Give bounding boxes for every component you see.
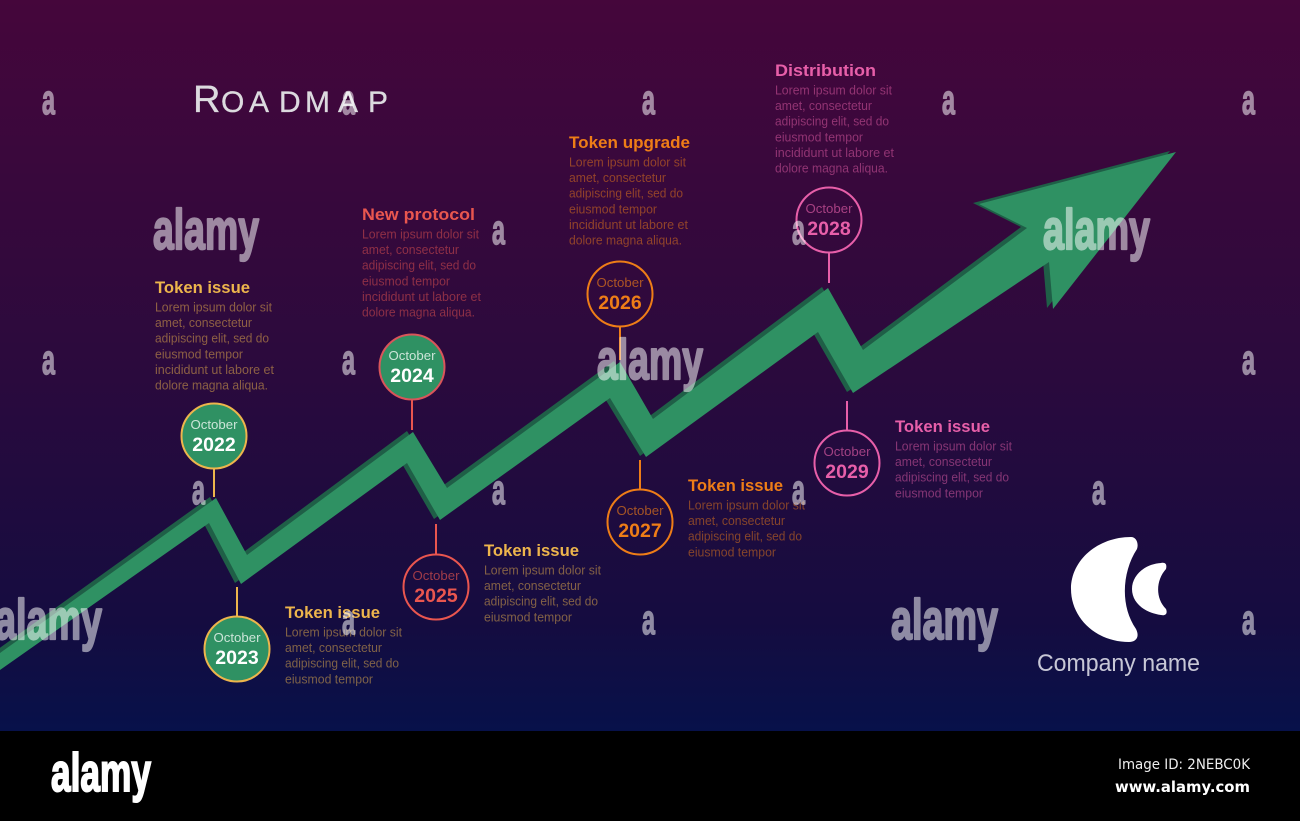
date 2029: October xyxy=(824,444,871,459)
milestone 2029 xyxy=(814,401,1013,500)
description 2029: amet, consectetur xyxy=(895,455,992,469)
description 2028: incididunt ut labore et xyxy=(775,146,895,160)
watermark overlay: a xyxy=(642,596,655,643)
description 2027: Lorem ipsum dolor sit xyxy=(688,498,806,512)
watermark overlay: a xyxy=(342,336,355,383)
year 2029: 2029 xyxy=(825,461,869,483)
description 2027: eiusmod tempor xyxy=(688,545,776,559)
year 2022: 2022 xyxy=(192,434,236,456)
badge 2029 xyxy=(814,430,880,496)
footer logo: alamy xyxy=(51,743,151,803)
logo large crescent xyxy=(1071,537,1138,642)
watermark overlay: a xyxy=(342,76,355,123)
heading 2027: Token issue xyxy=(688,476,783,495)
date 2022: October xyxy=(190,417,238,432)
description 2022: adipiscing elit, sed do xyxy=(155,332,269,346)
footer bar xyxy=(0,731,1300,821)
description 2024: amet, consectetur xyxy=(362,243,459,257)
connector 2026 xyxy=(619,327,621,360)
heading 2025: Token issue xyxy=(484,541,579,560)
footer url: www.alamy.com xyxy=(1115,778,1250,796)
heading 2024: New protocol xyxy=(362,205,475,224)
connector 2022 xyxy=(213,469,215,497)
description 2025: eiusmod tempor xyxy=(484,610,572,624)
description 2024: Lorem ipsum dolor sit xyxy=(362,228,480,242)
watermark overlay: a xyxy=(42,336,55,383)
description 2025: amet, consectetur xyxy=(484,579,581,593)
badge 2024 xyxy=(380,334,444,400)
heading 2028: Distribution xyxy=(775,61,876,80)
rising zigzag arrow xyxy=(0,151,1176,670)
description 2025: adipiscing elit, sed do xyxy=(484,595,598,609)
milestone 2025 xyxy=(404,524,602,624)
description 2024 xyxy=(362,228,482,320)
connector 2029 xyxy=(846,401,848,430)
description 2027 xyxy=(688,498,806,559)
connector 2023 xyxy=(236,587,238,616)
heading 2023: Token issue xyxy=(285,603,380,622)
description 2029: Lorem ipsum dolor sit xyxy=(895,440,1013,454)
description 2023: adipiscing elit, sed do xyxy=(285,657,399,671)
badge 2022 xyxy=(182,404,246,468)
title: OADMAP xyxy=(221,86,388,119)
description 2024: dolore magna aliqua. xyxy=(362,306,475,320)
milestone 2028 xyxy=(775,61,895,283)
arrow body xyxy=(0,152,1176,670)
connector 2028 xyxy=(828,253,830,283)
milestone 2023 xyxy=(204,587,403,686)
heading 2029: Token issue xyxy=(895,417,990,436)
description 2022: eiusmod tempor xyxy=(155,347,243,361)
badge 2025 xyxy=(404,554,468,620)
description 2028: adipiscing elit, sed do xyxy=(775,115,889,129)
watermark overlay: a xyxy=(492,206,505,253)
badge 2027 xyxy=(608,490,672,554)
watermark overlay: a xyxy=(1242,336,1255,383)
image id: Image ID: 2NEBC0K xyxy=(1118,757,1250,773)
description 2024: incididunt ut labore et xyxy=(362,290,482,304)
description 2026: amet, consectetur xyxy=(569,171,666,185)
description 2026: dolore magna aliqua. xyxy=(569,234,682,248)
description 2023: Lorem ipsum dolor sit xyxy=(285,626,403,640)
watermark overlay: a xyxy=(792,206,805,253)
description 2029: adipiscing elit, sed do xyxy=(895,471,1009,485)
description 2027: amet, consectetur xyxy=(688,514,785,528)
logo small crescent xyxy=(1132,563,1167,615)
title: R xyxy=(193,79,220,121)
description 2022: amet, consectetur xyxy=(155,316,252,330)
watermark overlay: alamy xyxy=(891,588,998,652)
connector 2027 xyxy=(639,460,641,489)
description 2024: eiusmod tempor xyxy=(362,274,450,288)
badge 2028 xyxy=(796,188,862,252)
year 2027: 2027 xyxy=(618,520,662,542)
badge 2023 xyxy=(204,616,270,682)
description 2026: eiusmod tempor xyxy=(569,202,657,216)
description 2026 xyxy=(569,156,689,248)
badge 2026 xyxy=(588,262,652,326)
year 2028: 2028 xyxy=(807,218,851,240)
description 2025: Lorem ipsum dolor sit xyxy=(484,564,602,578)
description 2025 xyxy=(484,564,602,624)
watermark overlay: alamy xyxy=(153,198,259,262)
watermark overlay: a xyxy=(492,466,505,513)
milestone 2022 xyxy=(155,278,275,497)
description 2026: Lorem ipsum dolor sit xyxy=(569,156,687,170)
description 2023 xyxy=(285,626,403,686)
watermark overlay: a xyxy=(42,76,55,123)
watermark overlay: a xyxy=(192,466,205,513)
company name: Company name xyxy=(1037,650,1200,677)
connector 2024 xyxy=(411,400,413,430)
description 2022: incididunt ut labore et xyxy=(155,363,275,377)
watermark overlay: a xyxy=(1092,466,1105,513)
date 2026: October xyxy=(596,275,644,290)
connector 2025 xyxy=(435,524,437,554)
description 2026: adipiscing elit, sed do xyxy=(569,187,683,201)
date 2027: October xyxy=(616,503,664,518)
description 2028: Lorem ipsum dolor sit xyxy=(775,84,893,98)
description 2028: amet, consectetur xyxy=(775,99,872,113)
description 2026: incididunt ut labore et xyxy=(569,218,689,232)
watermark overlay: a xyxy=(792,466,805,513)
arrow shadow xyxy=(0,151,1170,669)
description 2028: dolore magna aliqua. xyxy=(775,162,888,176)
year 2026: 2026 xyxy=(598,292,642,314)
description 2023: amet, consectetur xyxy=(285,641,382,655)
year 2023: 2023 xyxy=(215,647,259,669)
watermark overlay: a xyxy=(342,596,355,643)
milestone 2024 xyxy=(362,205,482,430)
description 2024: adipiscing elit, sed do xyxy=(362,259,476,273)
watermark overlay xyxy=(0,76,1255,652)
milestone 2027 xyxy=(608,460,806,559)
watermark overlay: alamy xyxy=(1043,198,1150,262)
description 2023: eiusmod tempor xyxy=(285,672,373,686)
description 2028: eiusmod tempor xyxy=(775,130,863,144)
milestone 2026 xyxy=(569,133,690,360)
date 2024: October xyxy=(388,348,436,363)
description 2022: Lorem ipsum dolor sit xyxy=(155,300,273,314)
heading 2022: Token issue xyxy=(155,278,250,297)
description 2027: adipiscing elit, sed do xyxy=(688,530,802,544)
description 2029: eiusmod tempor xyxy=(895,486,983,500)
description 2022 xyxy=(155,300,275,392)
watermark overlay: a xyxy=(1242,596,1255,643)
year 2025: 2025 xyxy=(414,585,458,607)
watermark overlay: a xyxy=(642,76,655,123)
description 2028 xyxy=(775,84,895,176)
date 2025: October xyxy=(412,568,460,583)
description 2022: dolore magna aliqua. xyxy=(155,378,268,392)
watermark overlay: alamy xyxy=(597,328,703,392)
description 2029 xyxy=(895,440,1013,500)
date 2028: October xyxy=(806,201,853,216)
company logo xyxy=(1071,537,1167,642)
watermark overlay: a xyxy=(942,76,955,123)
date 2023: October xyxy=(214,630,261,645)
heading 2026: Token upgrade xyxy=(569,133,690,152)
watermark overlay: a xyxy=(1242,76,1255,123)
year 2024: 2024 xyxy=(390,365,434,387)
